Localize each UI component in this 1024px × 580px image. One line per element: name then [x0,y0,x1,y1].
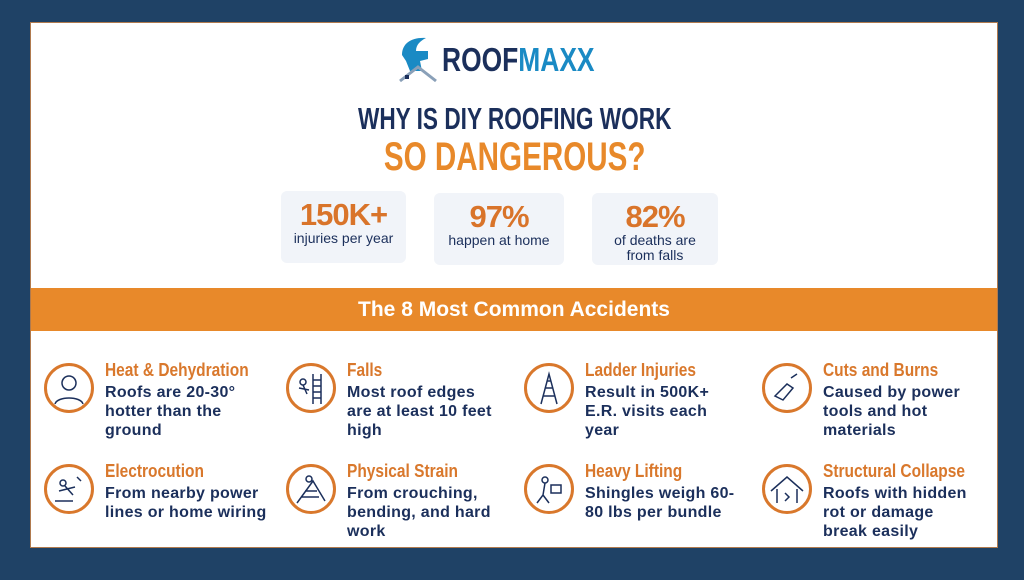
item: cuts: Cuts and Burns [823,360,938,380]
item: ladder: Result in 500K+ E.R. visits each year [585,384,709,439]
stat 1: 150K+ [300,197,387,232]
stat 2: 97% [469,199,529,234]
item: electrocution [44,461,267,521]
item: ladder: Ladder Injuries [585,360,696,380]
icon: shock [44,464,94,514]
item: collapse [762,461,967,540]
stat 3: of deaths are [614,232,696,248]
banner [31,288,997,331]
stat 3 [592,193,718,265]
item: falls [286,360,492,439]
item: lifting: Heavy Lifting [585,461,682,481]
stat 3: from falls [627,247,683,263]
icon: hand [762,363,812,413]
stat 1: injuries per year [294,230,393,246]
item: collapse: Roofs with hidden rot or damage break easily [823,485,967,540]
icon: roof worker [286,464,336,514]
item: strain [286,461,491,540]
item: falls: Falls [347,360,382,380]
item: heat [44,360,249,439]
stat 2 [434,193,564,265]
item: cuts [762,360,960,439]
item: ladder [524,360,709,439]
banner: The 8 Most Common Accidents [358,298,670,321]
title: WHY IS DIY ROOFING WORK [358,101,672,136]
title: SO DANGEROUS? [384,135,646,179]
item: electrocution: From nearby power lines or home wiring [105,485,267,521]
item: collapse: Structural Collapse [823,461,965,481]
logo text: ROOFMAXX [442,41,595,78]
icon: person [44,363,94,413]
icon: roof collapse [762,464,812,514]
item: cuts: Caused by power tools and hot materials [823,384,960,439]
icon: ladder [524,363,574,413]
logo [399,38,595,82]
title [358,101,672,179]
icon: ladder fall [286,363,336,413]
item: falls: Most roof edges are at least 10 feet high [347,384,492,439]
item: strain: Physical Strain [347,461,458,481]
item: lifting: Shingles weigh 60-80 lbs per bundle [585,485,734,521]
stat 1 [281,191,406,263]
item: electrocution: Electrocution [105,461,204,481]
stat 2: happen at home [448,232,550,248]
icon: lifting [524,464,574,514]
item: strain: From crouching, bending, and hard work [347,485,491,540]
stat 3: 82% [625,199,685,234]
item: heat: Heat & Dehydration [105,360,249,380]
item: lifting [524,461,734,521]
icon: helmet [399,38,437,82]
item: heat: Roofs are 20-30° hotter than the ground [105,384,235,439]
